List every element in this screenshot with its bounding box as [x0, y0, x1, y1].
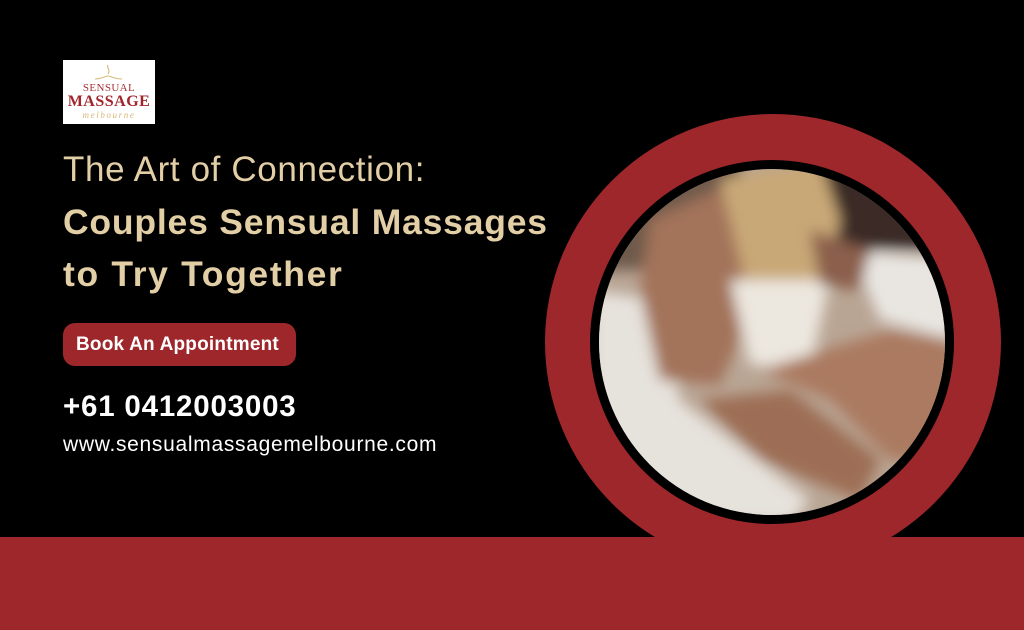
heading line 3: to Try Together	[63, 254, 344, 294]
website: www.sensualmassagemelbourne.com	[63, 433, 437, 456]
photo: soft abstract tones in a circular frame	[590, 160, 954, 524]
logo text: melbourne: melbourne	[83, 110, 135, 120]
red ring circle	[545, 114, 1001, 570]
button label: Book An Appointment	[76, 334, 279, 355]
heading line 1: The Art of Connection:	[63, 150, 425, 189]
button	[63, 323, 296, 366]
logo mark	[95, 64, 122, 80]
heading line 2: Couples Sensual Massages	[63, 202, 548, 242]
bottom red band	[0, 537, 1024, 630]
logo text: massage: MASSAGE	[68, 93, 150, 110]
logo text: sensual: SENSUAL	[83, 82, 135, 94]
logo	[63, 60, 155, 124]
phone number: +61 0412003003	[63, 390, 297, 423]
